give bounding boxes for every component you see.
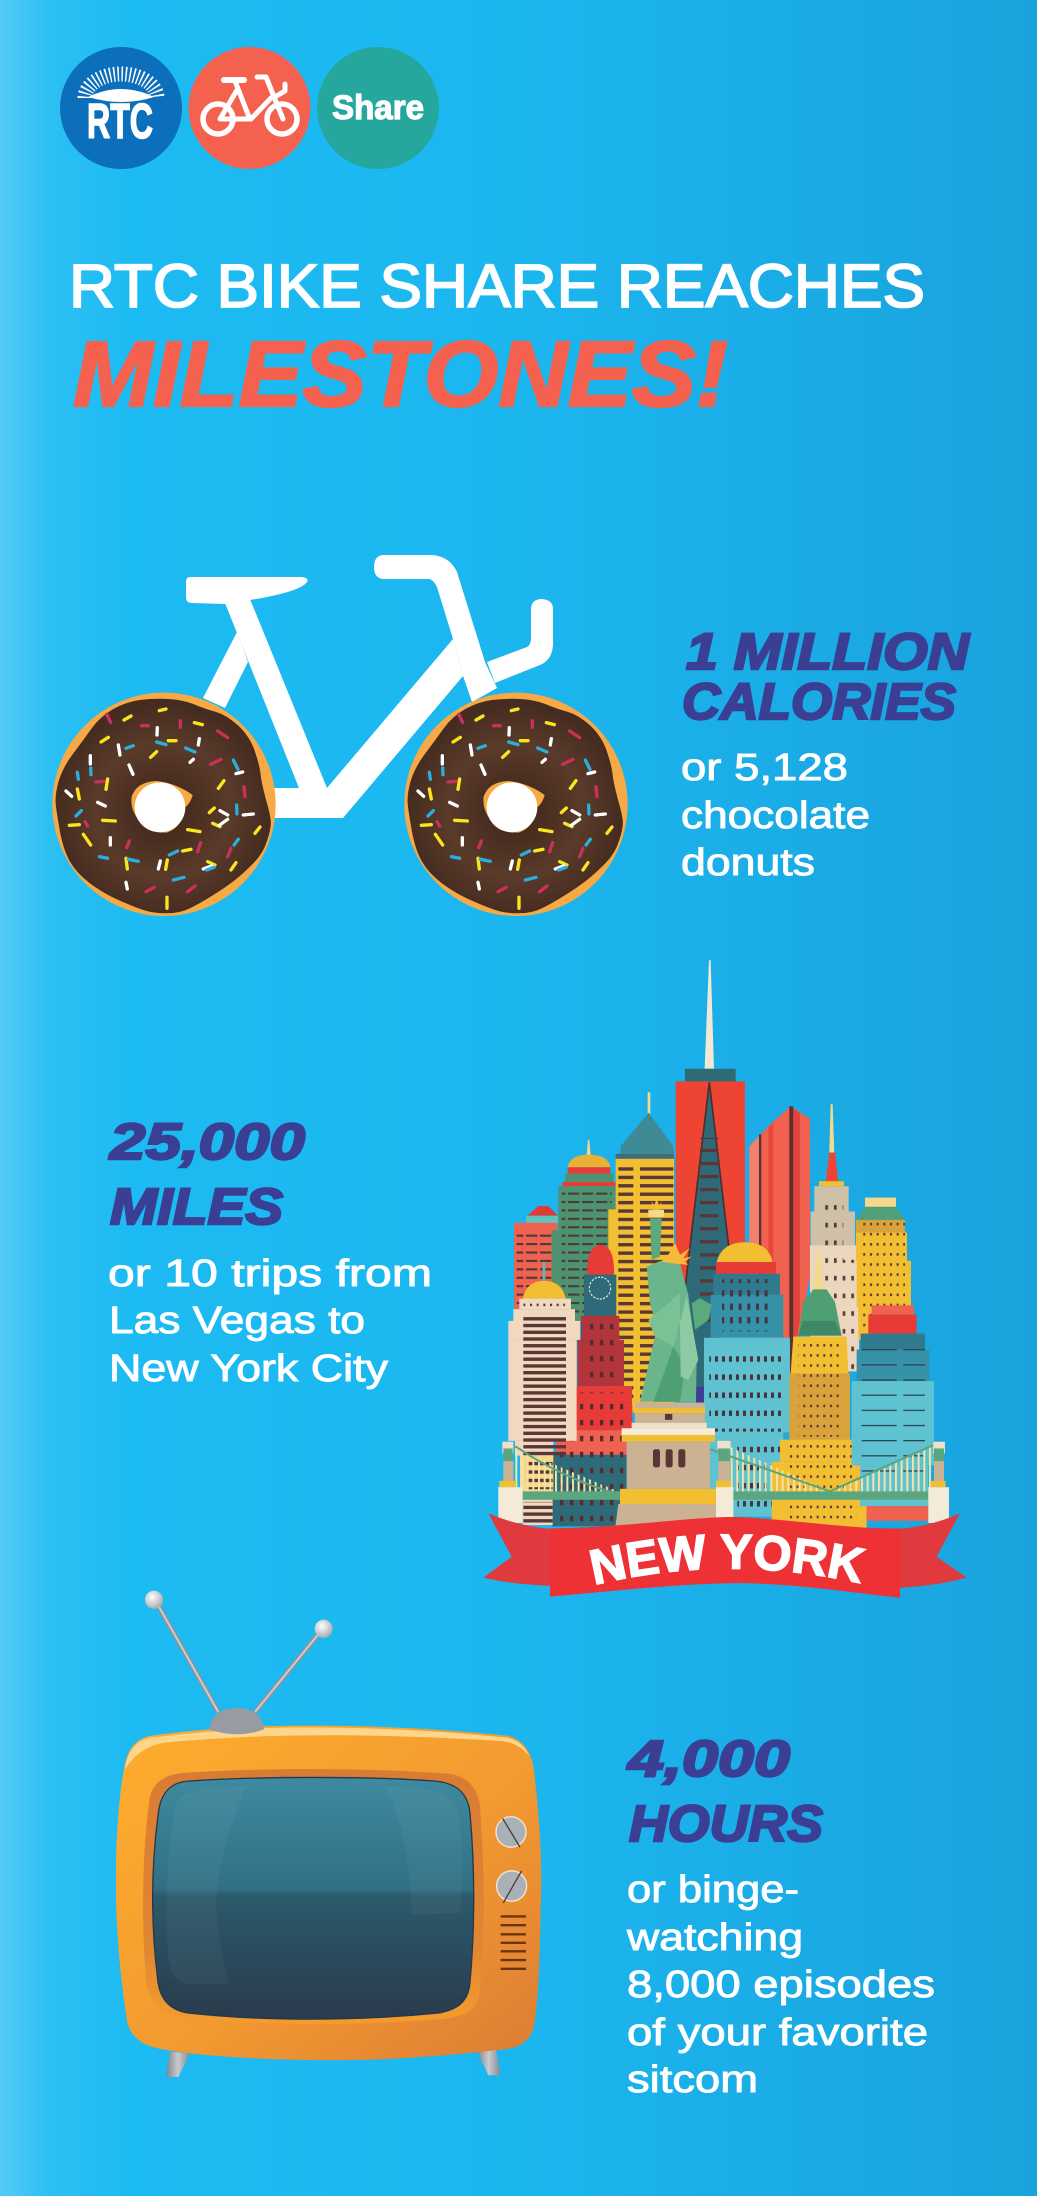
stat description: of your favorite (627, 2012, 928, 2054)
stat description: 8,000 episodes (627, 1964, 935, 2006)
stat description: sitcom (627, 2059, 758, 2101)
logo: bicycle (188, 47, 310, 169)
stat heading (627, 1730, 823, 1852)
stat description (626, 1869, 935, 2101)
stat heading: HOURS (629, 1795, 823, 1852)
statue pedestal (615, 1403, 718, 1529)
skyline buildings (508, 960, 934, 1531)
stat heading: CALORIES (682, 673, 956, 730)
tv antenna base (209, 1708, 264, 1734)
logo: RTC (60, 47, 182, 169)
stat heading (682, 623, 970, 730)
tv knobs (496, 1817, 527, 1903)
New York ribbon banner: NEW YORK (589, 1534, 867, 1585)
logo: Share (317, 47, 439, 169)
tv speaker (501, 1916, 526, 1969)
tv screen reflection (167, 1786, 462, 1984)
tv bezel (143, 1769, 484, 2024)
tv antenna (145, 1591, 333, 1712)
logo: Share: Share (332, 89, 424, 127)
illustration: New York skyline (483, 960, 966, 1598)
heading: milestones: MILESTONES! (73, 322, 728, 426)
heading line: RTC BIKE SHARE REACHES (69, 252, 925, 320)
stat heading: 25,000 (109, 1113, 305, 1170)
stat description: or 10 trips from (108, 1253, 432, 1295)
bridges (498, 1441, 949, 1523)
tv legs (166, 2050, 501, 2077)
donut wheel: left (52, 693, 276, 916)
stat description: or binge- (627, 1869, 799, 1911)
stat description (681, 747, 870, 884)
logo: RTC: RTC (87, 95, 153, 149)
stat heading: 4,000 (627, 1730, 790, 1787)
stat heading: 1 MILLION (686, 623, 970, 680)
stat: miles (108, 1113, 432, 1390)
stat description: chocolate (681, 795, 870, 837)
tv highlight (125, 1727, 529, 1769)
New York ribbon banner (483, 1513, 966, 1598)
Statue of Liberty (640, 1198, 712, 1402)
stat description: New York City (109, 1348, 388, 1390)
stat description: or 5,128 (681, 747, 848, 789)
stat: hours (626, 1730, 935, 2101)
stat description: watching (626, 1917, 803, 1959)
illustration: donut bicycle (52, 555, 628, 916)
illustration: retro television (116, 1591, 541, 2077)
stat description: Las Vegas to (109, 1300, 365, 1342)
title (69, 252, 925, 426)
stat heading: MILES (110, 1178, 283, 1235)
bicycle frame (186, 555, 553, 818)
stat: calories (681, 623, 970, 884)
donut wheel: right (404, 693, 628, 916)
stat heading (109, 1113, 305, 1235)
stat description (108, 1253, 432, 1390)
tv body (116, 1726, 541, 2060)
stat description: donuts (681, 842, 815, 884)
tv screen (153, 1777, 474, 2019)
logos row (60, 47, 439, 169)
